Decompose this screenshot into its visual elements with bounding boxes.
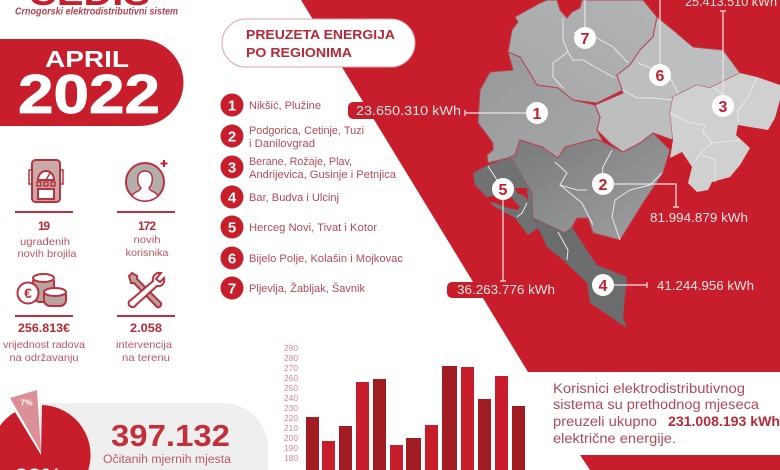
stat: interventions: 2.058 (130, 321, 162, 335)
region legend: Podgorica, Cetinje, Tuzi (249, 125, 364, 137)
stat: meters: novih brojila (18, 248, 77, 260)
region legend: 1 (228, 98, 236, 114)
region legend: 5 (228, 220, 236, 236)
pie summary panel: 397.132 (111, 418, 230, 453)
bar chart (284, 343, 525, 470)
icon: tools (129, 273, 164, 307)
region legend: Herceg Novi, Tivat i Kotor (249, 222, 377, 234)
summary text: preuzeli ukupno (553, 414, 657, 429)
y axis labels: 180 (284, 453, 298, 463)
y axis labels: 190 (284, 443, 298, 453)
callout: region 5 (447, 178, 555, 298)
summary text: 231.008.193 kWh (668, 414, 780, 429)
summary text: sistema su prethodnog mjeseca (553, 397, 760, 412)
callout: region 2: 2 (599, 177, 608, 194)
pie chart: 7% (20, 398, 33, 408)
region 5 (473, 158, 538, 235)
stat: works value (3, 274, 85, 364)
y axis labels: 260 (284, 373, 298, 383)
date banner (0, 39, 183, 126)
region 6 (595, 17, 740, 152)
heading: energy by region (222, 19, 415, 67)
y axis labels: 250 (284, 383, 298, 393)
bays (483, 188, 528, 210)
summary text (553, 381, 780, 446)
callout: region 4: 4 (599, 278, 608, 295)
region 7 (508, 0, 657, 103)
region legend: i Danilovgrad (249, 138, 315, 150)
callout: region 5: 5 (499, 182, 508, 199)
pie summary panel (0, 390, 268, 470)
callout: region 6 (649, 0, 671, 86)
callout: region 1 (348, 102, 548, 124)
y axis labels: 240 (284, 393, 298, 403)
callout: region 5: 36.263.776 kWh (457, 282, 555, 297)
callout: region 6: 6 (656, 68, 665, 85)
stat: users: novih (134, 234, 161, 246)
callout: region 2: 81.994.879 kWh (650, 210, 748, 225)
callout: region 4: 41.244.956 kWh (657, 278, 754, 293)
stat: works value: na održavanju (10, 352, 79, 364)
callout: region 1: 1 (533, 106, 542, 123)
stat: users (117, 160, 175, 259)
red lower right band (580, 455, 780, 470)
icon: user plus (126, 160, 168, 201)
stat: works value: 256.813€ (18, 321, 70, 335)
icon: meter (29, 160, 63, 202)
region 4 (533, 218, 627, 328)
y axis labels (284, 343, 298, 463)
stat: users: korisnika (126, 247, 169, 259)
heading: energy by region: PREUZETA ENERGIJA (246, 27, 396, 42)
region legend: Nikšić, Plužine (249, 100, 321, 112)
y axis labels: 280 (284, 353, 298, 363)
stat: meters: ugrađenih (20, 236, 70, 248)
callout: region 2 (592, 173, 748, 225)
region legend: Pljevlja, Žabljak, Šavnik (249, 282, 365, 295)
region 2 (508, 133, 670, 240)
region legend: Berane, Rožaje, Plav, (249, 156, 352, 168)
map of regions (473, 0, 780, 328)
inner municipal borders (488, 18, 757, 260)
region legend: 3 (228, 160, 236, 176)
icon: coins: € (24, 285, 32, 301)
region 3 (670, 73, 780, 192)
stat: interventions: intervencija (116, 339, 172, 351)
summary text: Korisnici elektrodistributivnog (553, 381, 745, 396)
logo: Crnogorski elektrodistributivni sistem (15, 6, 178, 18)
region 1 (478, 52, 603, 163)
date banner: APRIL (45, 46, 129, 72)
callout: region 4 (592, 274, 754, 296)
stat: interventions: na terenu (122, 352, 170, 364)
callout: region 3: 3 (719, 99, 728, 116)
y axis labels: 220 (284, 413, 298, 423)
region legend: Bijelo Polje, Kolašin i Mojkovac (249, 253, 403, 265)
callout: region 3 (685, 0, 777, 117)
callout: region 7 (574, 0, 596, 49)
y axis labels: 230 (284, 403, 298, 413)
red diagonal background (301, 0, 780, 372)
region legend: 6 (228, 250, 236, 268)
stat: meters (15, 160, 77, 260)
y axis labels: 210 (284, 423, 298, 433)
logo (15, 0, 178, 18)
stat: users: 172 (138, 219, 156, 233)
heading: energy by region: PO REGIONIMA (246, 45, 353, 60)
date banner: 2022 (18, 63, 160, 125)
pie summary panel: Očitanih mjernih mjesta (103, 454, 232, 466)
stat: works value: vrijednost radova (3, 339, 85, 351)
callout: region 1: 23.650.310 kWh (356, 103, 461, 118)
region legend: 2 (228, 128, 236, 146)
y axis labels: 270 (284, 363, 298, 373)
region legend: 4 (228, 190, 237, 206)
y axis labels: 200 (284, 433, 298, 443)
summary text: električne energije. (553, 431, 676, 446)
stat: meters: 19 (38, 219, 50, 233)
region legend: Bar, Budva i Ulcinj (249, 192, 339, 204)
region legend: Andrijevica, Gusinje i Petnjica (249, 169, 397, 181)
y axis labels: 290 (284, 343, 298, 353)
region legend (220, 94, 403, 300)
stat: interventions (116, 273, 175, 364)
callout: region 7: 7 (581, 31, 590, 48)
pie chart (0, 390, 91, 470)
region legend: 7 (228, 280, 236, 298)
